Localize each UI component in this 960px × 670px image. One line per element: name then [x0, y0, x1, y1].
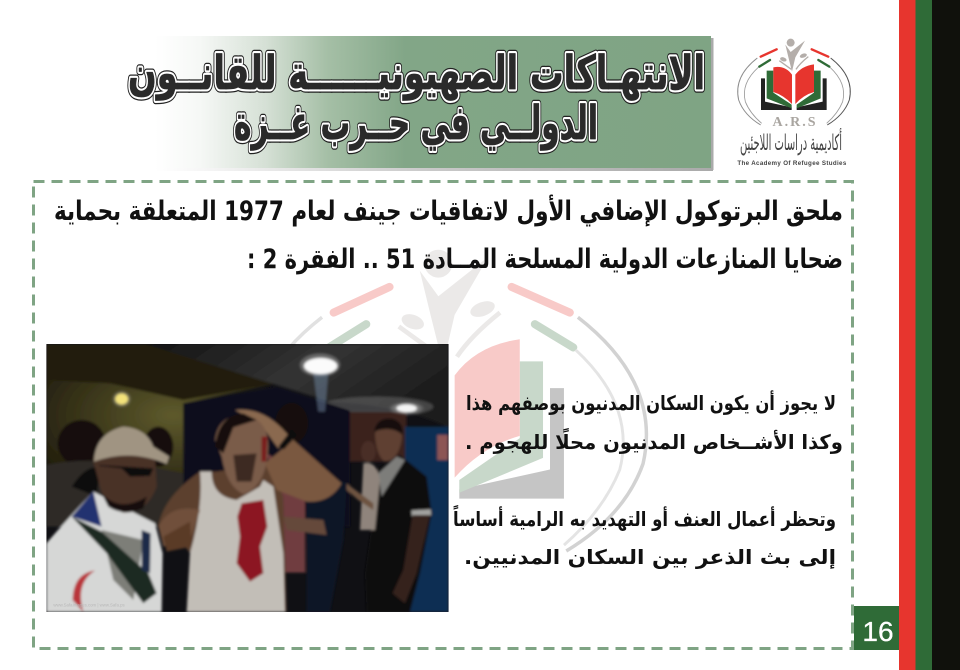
man behind with check shirt — [275, 403, 308, 444]
paragraph 2 line 1: وتحظر أعمال العنف أو التهديد به الرامية أساساً — [453, 505, 836, 531]
glasses — [98, 465, 153, 477]
blue wall — [405, 427, 449, 612]
content frame dashed border — [34, 182, 852, 648]
logo initials: A.R.S — [772, 115, 818, 130]
injured man body & tank top — [158, 463, 287, 612]
photo: wounded man at hospital — [46, 344, 449, 612]
page number badge — [854, 606, 899, 650]
photo credit: www.SafaImages.com | www.Safa.ps — [53, 603, 125, 608]
crescent — [73, 571, 95, 612]
title line 1: الانتهـاكات الصهيونيــــــة للقانــون — [128, 46, 705, 101]
heading line 2: ضحايا المنازعات الدولية المسلحة المــادة 51 .. الفقرة 2 : — [247, 244, 843, 275]
watch — [278, 429, 297, 449]
background man in dark polo — [365, 455, 432, 612]
title line 2 — [234, 96, 598, 151]
arches — [58, 420, 106, 467]
dark middle — [183, 387, 350, 527]
title line 1: الانتهـاكات الصهيونيــــــة للقانــون — [128, 46, 705, 101]
title line 2: الدولــي في حــرب غــزة — [234, 96, 598, 151]
car — [46, 461, 183, 527]
title line 1: الانتهـاكات الصهيونيــــــة للقانــون — [128, 46, 705, 101]
page number: 16 — [862, 616, 894, 647]
paragraph 1 line 1: لا يجوز أن يكون السكان المدنيون بوصفهم هذا — [466, 389, 836, 415]
tricolour side stripes — [899, 0, 960, 670]
title line 2: الدولــي في حــرب غــزة — [234, 96, 598, 151]
paragraph 1 line 2: وكذا الأشــخاص المدنيون محلًا للهجوم . — [465, 428, 843, 454]
other bystanders — [360, 463, 380, 530]
title banner — [128, 36, 714, 171]
scout man jacket — [46, 492, 163, 612]
arm holding — [158, 509, 200, 547]
logo: Academy of Refugee Studies — [737, 39, 850, 167]
logo English name: The Academy Of Refugee Studies — [737, 160, 847, 167]
blood stain — [237, 500, 267, 582]
head — [215, 415, 268, 494]
lamp bright — [304, 358, 337, 374]
cap — [94, 427, 169, 464]
watermark logo — [254, 250, 646, 551]
scout head — [93, 446, 157, 513]
lamps — [300, 354, 340, 376]
title line 2: الدولــي في حــرب غــزة — [234, 96, 598, 151]
logo: Academy of Refugee Studies: أكاديمية دراسات اللاجئين — [740, 128, 842, 156]
wall left — [46, 379, 271, 474]
paragraph 2 line 2: إلى بث الذعر بين السكان المدنيين. — [464, 545, 836, 569]
heading line 1: ملحق البرتوكول الإضافي الأول لاتفاقيات جينف لعام 1977 المتعلقة بحماية — [54, 194, 843, 227]
ceiling — [145, 344, 449, 427]
injured man's raised arm — [265, 440, 342, 502]
